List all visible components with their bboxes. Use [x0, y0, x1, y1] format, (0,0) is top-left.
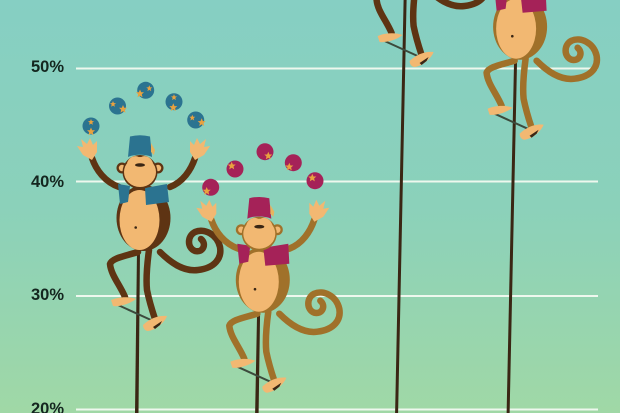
axis labels: 40% [31, 173, 64, 191]
monkey 2: crimson vest at about 20-30% [196, 143, 340, 413]
gridlines [76, 68, 598, 410]
monkey 3: upper body off canvas [377, 0, 487, 413]
monkey 4: crimson vest, upper body off canvas [487, 0, 597, 413]
monkey 1: teal vest at about 30-40% [77, 82, 220, 413]
axis labels: 30% [31, 286, 64, 304]
axis labels: 50% [31, 58, 64, 76]
balls: teal [82, 82, 206, 135]
axis labels [31, 58, 64, 413]
balls: crimson [202, 143, 324, 196]
